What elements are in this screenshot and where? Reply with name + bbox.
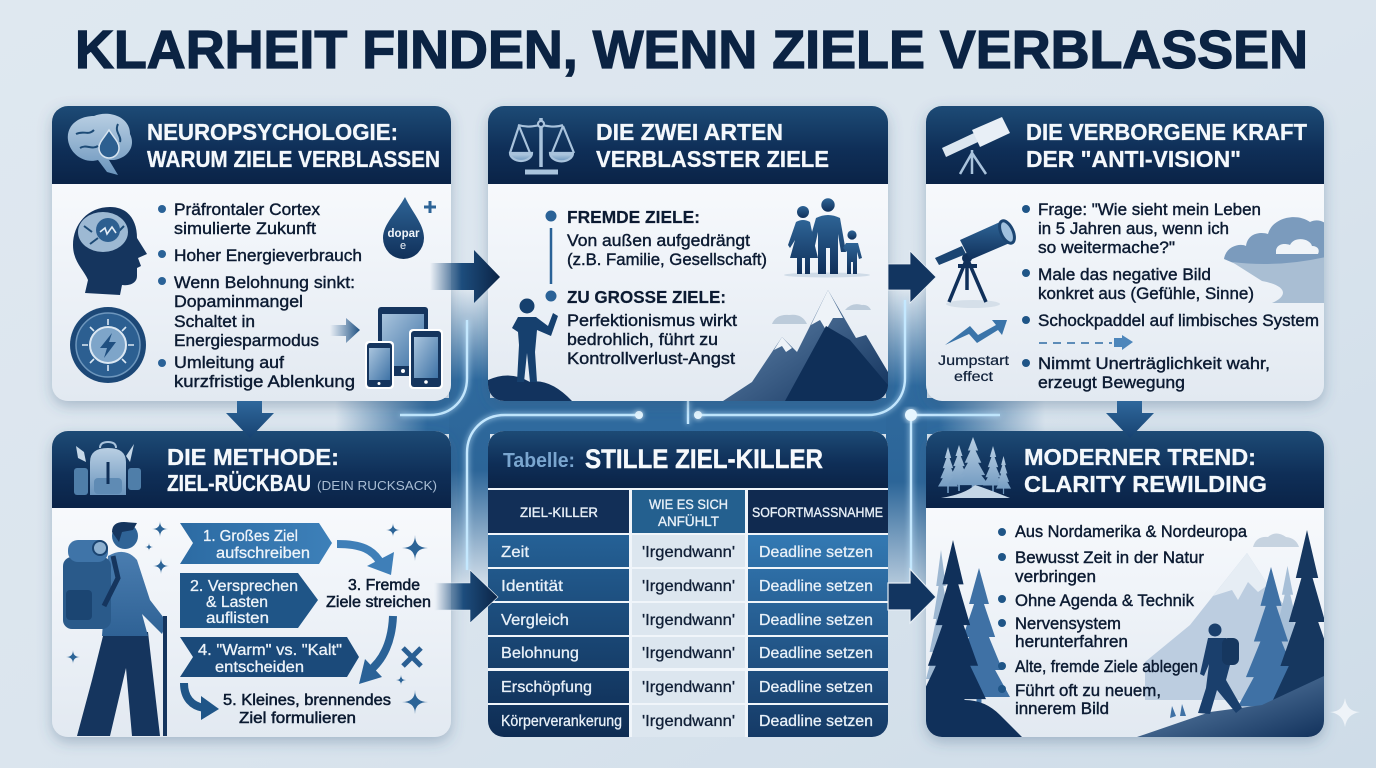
illustration: forest landscape [920,530,1342,737]
bullet list: Aus Nordamerika & Nordeuropa [1015,522,1248,541]
bullet list: Präfrontaler Cortex [174,200,320,219]
heading [167,444,437,496]
table rows: Deadline setzen [759,544,873,561]
table header row: ANFÜHLT [658,512,719,529]
heading: DIE METHODE: [167,444,339,470]
table rows: 'Irgendwann' [642,578,735,595]
arrow: panel 5 to 6 [888,569,936,623]
arrow: panel 1 to 2 [430,250,500,303]
bullet list: Schaltet in [174,312,255,331]
step 4 [180,637,359,677]
bullet list: Ohne Agenda & Technik [1015,591,1194,610]
bullet list: in 5 Jahren aus, wenn ich [1038,219,1229,238]
heading: DER "ANTI-VISION" [1026,146,1241,172]
table rows: 'Irgendwann' [642,544,735,561]
text: Zu grosse Ziele: ZU GROSSE ZIELE: [567,287,726,307]
icon: dopamine drop [383,197,436,259]
step 2: & Lasten [206,594,268,611]
arrow to devices [330,318,360,343]
bullet list: Nervensystem [1015,614,1121,633]
heading [1024,444,1267,497]
heading: CLARITY REWILDING [1024,471,1267,497]
panel: Neuropsychologie [52,106,451,401]
bullet list: Frage: "Wie sieht mein Leben [1038,200,1261,219]
table rows: 'Irgendwann' [642,612,735,629]
timeline dots [546,210,556,302]
illustration: clouds [1224,217,1330,303]
text: Fremde Ziele: Von außen aufgedrängt [567,231,750,250]
bullet list: herunterfahren [1015,632,1128,651]
bullet list: erzeugt Bewegung [1038,373,1185,392]
icon: dopamine drop: dopar [388,228,420,240]
heading [147,119,440,172]
bullet list [1022,200,1319,392]
step 5: 5. Kleines, brennendes [223,692,391,709]
step 5: Ziel formulieren [239,710,356,727]
bullet list: Male das negative Bild [1038,265,1211,284]
bullet list: Bewusst Zeit in der Natur [1015,548,1204,567]
step 3: Ziele streichen [326,594,431,611]
sparkle watermark [1330,698,1360,727]
sparkles [66,521,428,714]
icon: head silhouette [73,207,147,295]
step 3: 3. Fremde [348,577,420,594]
table rows: Deadline setzen [759,612,873,629]
panel: Tabelle Stille Ziel-Killer [488,431,888,737]
text: Zu grosse Ziele: Perfektionismus wirkt [567,311,737,330]
icon: cross [403,648,421,666]
panel: Anti-Vision [926,106,1330,401]
icon: scales [510,118,574,172]
bullet list: Hoher Energieverbrauch [174,246,362,265]
icon: trees [938,437,1011,498]
panel: Die Methode [52,431,451,737]
bullet list: kurzfristige Ablenkung [174,372,355,391]
text: Zu grosse Ziele: bedrohlich, führt zu [567,330,718,349]
bullet list: simulierte Zukunft [174,219,316,238]
heading: NEUROPSYCHOLOGIE: [147,119,398,145]
panel: Die zwei Arten [488,106,888,401]
heading: DIE ZWEI ARTEN [596,119,783,145]
table header row [488,490,888,533]
bullet list: Nimmt Unerträglichkeit wahr, [1038,354,1270,373]
dashed arrow [1039,335,1133,350]
label: jumpstart effect [938,353,1009,384]
bullet list: Führt oft zu neuem, [1015,681,1161,700]
heading: VERBLASSTER ZIELE [596,146,829,172]
text: Zu grosse Ziele: Kontrollverlust-Angst [567,349,735,368]
heading: (DEIN RUCKSACK) [317,478,437,493]
heading [1026,119,1308,172]
bullet list: Wenn Belohnung sinkt: [174,273,355,292]
icon: devices [365,307,443,389]
table rows: Vergleich [501,612,569,629]
step 4: 4. "Warm" vs. "Kalt" [198,642,342,659]
table rows: Identität [501,578,564,595]
text: Fremde Ziele [567,207,767,269]
table rows: 'Irgendwann' [642,713,735,730]
icon: brain with drop [68,114,132,175]
heading: WARUM ZIELE VERBLASSEN [147,146,440,172]
step 1: 1. Großes Ziel [203,528,298,545]
heading: MODERNER TREND: [1024,444,1256,470]
bullet list [158,200,362,391]
illustration: mountains and person [488,290,888,401]
arrow: step 3 to 5 [359,616,393,684]
table rows: 'Irgendwann' [642,679,735,696]
table title bar [488,431,888,488]
icon: family [784,198,870,278]
bullet list: Dopaminmangel [174,292,303,311]
table rows: Körperverankerung [501,713,622,730]
step 1 [180,523,332,564]
bullet list: konkret aus (Gefühle, Sinne) [1038,284,1254,303]
arrow: panel 4 to 5 [435,570,498,623]
title: KLARHEIT FINDEN, WENN ZIELE VERBLASSEN [75,20,1308,80]
bullet list: innerem Bild [1015,699,1109,718]
icon: telescope header [942,117,1010,174]
table rows: Belohnung [501,645,579,662]
step 3 [326,577,431,611]
table rows: 'Irgendwann' [642,645,735,662]
arrow: step 4 to 5 [184,683,219,720]
icon: energy dial [70,307,146,383]
step 2: auflisten [206,610,269,627]
table header row: WIE ES SICH [649,496,728,512]
bullet list: Umleitung auf [174,353,284,372]
step 2: 2. Versprechen [190,578,298,595]
table rows: Deadline setzen [759,578,873,595]
table rows: Deadline setzen [759,713,873,730]
heading: DIE VERBORGENE KRAFT [1026,119,1308,145]
arrow: step 1 to 3 [337,544,394,575]
label: jumpstart effect: effect [954,369,993,384]
step 1: aufschreiben [216,545,310,562]
walker [1198,624,1242,714]
icon: backpack [74,442,141,495]
bullet list: Alte, fremde Ziele ablegen [1015,657,1198,676]
heading [596,119,829,172]
table rows: Erschöpfung [501,679,592,696]
table title bar: Tabelle: [503,450,575,472]
table rows: Deadline setzen [759,679,873,696]
step 4: entscheiden [215,659,304,676]
bullet list: Schockpaddel auf limbisches System [1038,311,1319,330]
text: Zu grosse Ziele [567,287,737,368]
icon: telescope [935,219,1018,308]
table rows: Deadline setzen [759,645,873,662]
panel: Moderner Trend [920,431,1342,737]
table header row: ZIEL-KILLER [520,504,598,520]
icon: jumpstart arrow [945,320,1007,345]
arrow: panel 3 down to 6 [1106,401,1154,438]
step 2 [180,573,318,628]
table header row: SOFORTMASSNAHME [752,504,883,520]
label: jumpstart effect: Jumpstart [938,353,1009,368]
text: Fremde Ziele: FREMDE ZIELE: [567,207,700,227]
bullet list: Energiesparmodus [174,331,319,350]
step 5 [223,692,391,727]
arrow: panel 1 down to 4 [226,401,274,438]
arrow: panel 2 to 3 [888,251,936,303]
heading: ZIEL-RÜCKBAU [167,470,311,496]
connection glow network [335,290,1045,610]
illustration: hiker [63,522,167,736]
bullet list: so weitermache?" [1038,238,1175,257]
table rows: Zeit [501,544,530,561]
table rows [488,535,888,737]
table title bar: STILLE ZIEL-KILLER [585,444,823,474]
text: Fremde Ziele: (z.B. Familie, Gesellschaft) [567,250,767,269]
bullet list: verbringen [1015,567,1096,586]
bullet list [998,522,1248,718]
icon: dopamine drop: e [400,240,406,252]
